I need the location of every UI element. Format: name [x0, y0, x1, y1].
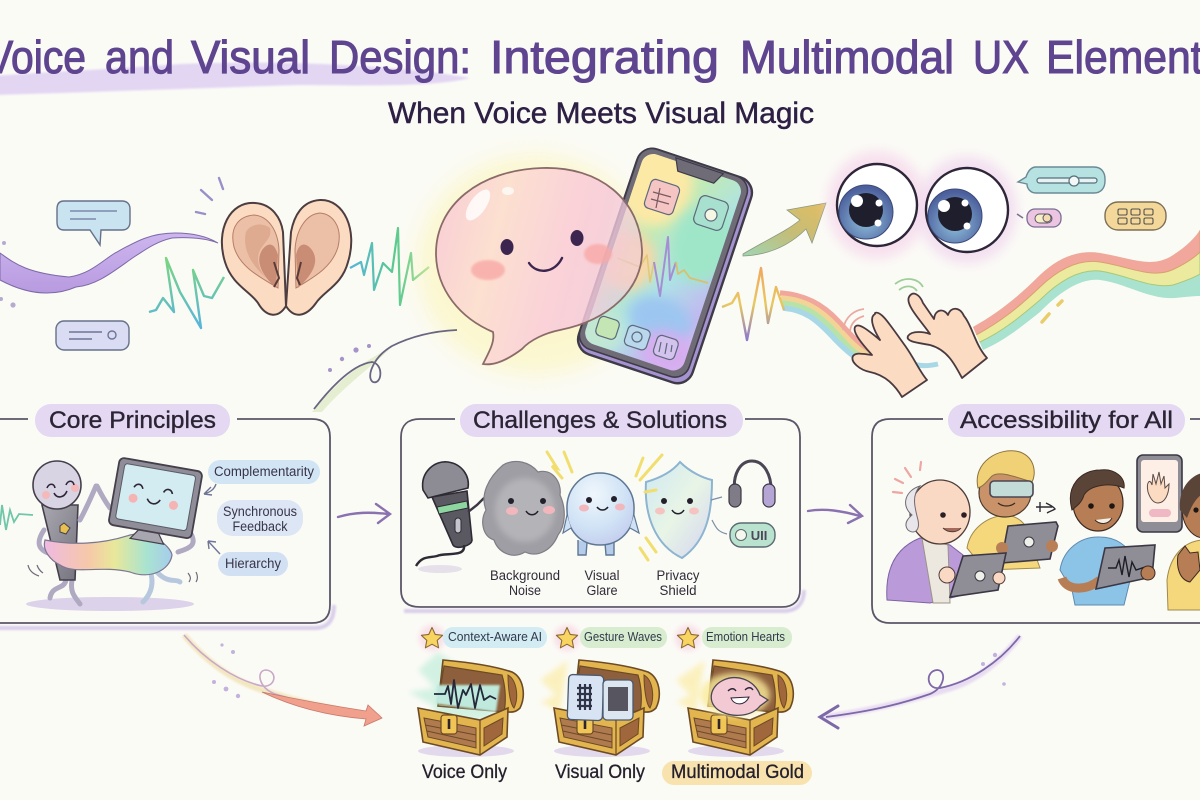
caption: Visual Only [555, 762, 645, 783]
voice ribbon [0, 233, 218, 293]
grid card [567, 674, 604, 721]
wave stub [0, 505, 33, 530]
rainbow scarf [44, 534, 172, 575]
microphone character [33, 461, 81, 580]
arrow: core to challenges [338, 504, 390, 523]
person: boy in blue [1060, 470, 1135, 605]
treasure: voice only [408, 625, 547, 783]
icon: chat bubble [57, 201, 130, 245]
icon: phone [576, 148, 754, 384]
icon: eyes [827, 151, 1017, 264]
high five arms [39, 486, 193, 555]
panel: core principles [0, 404, 334, 628]
panel frame [401, 419, 800, 607]
icon: message card [56, 321, 129, 350]
caption: Voice Only [422, 762, 507, 783]
label: complementarity [208, 460, 320, 484]
sound wave blue green [350, 228, 429, 305]
connector arrows [711, 497, 727, 534]
small arrows [204, 484, 220, 554]
treasure: visual only [540, 625, 667, 783]
label: hierarchy: Hierarchy [225, 556, 281, 571]
speech bubble glow [417, 155, 653, 375]
arrow: challenges to accessibility [808, 505, 862, 523]
glare blob [563, 473, 639, 555]
label: privacy shield: Shield [660, 583, 696, 598]
subtitle: When Voice Meets Visual Magic [388, 97, 814, 130]
chest [554, 660, 659, 757]
heading pill [948, 404, 1185, 437]
label: synchronous feedback: Synchronous [223, 504, 297, 519]
rainbow ribbon right [973, 230, 1200, 350]
shadow [26, 597, 194, 611]
icon: touch hands [843, 279, 987, 397]
feature pill [443, 627, 547, 648]
title: Design: [329, 31, 471, 83]
UI pill [730, 523, 775, 547]
label: visual glare [584, 568, 620, 598]
person: blond child [967, 451, 1040, 570]
content glow [436, 685, 500, 712]
person: elderly man [887, 480, 970, 603]
caption: Multimodal Gold [671, 762, 804, 783]
tablet: boy [1096, 545, 1155, 589]
feature pill: Context-Aware AI [448, 630, 542, 644]
yellow sparkle [1042, 301, 1062, 322]
label: synchronous feedback: Feedback [232, 519, 288, 534]
panel: challenges and solutions [401, 404, 804, 611]
sound wave [434, 680, 496, 708]
icon: two ears [222, 200, 351, 315]
feature pill: Gesture Waves [584, 630, 662, 644]
chest [418, 660, 523, 757]
sound ticks [196, 178, 223, 214]
heading: Core Principles [49, 407, 216, 434]
happy bubble [711, 678, 768, 715]
hearing ticks [893, 462, 921, 493]
panel frame [872, 419, 1200, 623]
caption pill [662, 761, 812, 785]
sound wave multicolor [722, 268, 784, 340]
noise cloud [483, 461, 564, 555]
speech bubble character [436, 168, 642, 364]
panel frame [0, 419, 330, 623]
feature pill [702, 627, 792, 648]
label: visual glare: Visual [584, 568, 620, 583]
microphone [416, 462, 484, 573]
arrow: core to treasure [184, 635, 382, 726]
star [675, 625, 701, 651]
title: UX [973, 31, 1029, 83]
chest [688, 660, 793, 757]
title: Multimodal [740, 31, 954, 83]
curl arrow from bubble [312, 330, 457, 412]
feature pill: Emotion Hearts [706, 630, 785, 644]
sound glyph [1036, 502, 1055, 513]
slider chip [1018, 167, 1105, 193]
dark glyph [608, 687, 628, 711]
glow [408, 652, 492, 720]
heading: Challenges & Solutions [473, 407, 727, 434]
title: Visual [191, 31, 310, 83]
title brush highlight [0, 63, 470, 95]
label: privacy shield: Privacy [656, 568, 700, 583]
phone app icons [594, 178, 730, 361]
heading: Accessibility for All [960, 407, 1173, 434]
privacy shield [646, 462, 712, 558]
label: background noise: Background [490, 568, 560, 583]
mic legs [50, 580, 80, 604]
panel: accessibility for all [872, 404, 1200, 628]
label: hierarchy [218, 552, 288, 576]
monitor legs [143, 570, 180, 602]
arrow: accessibility to treasure [820, 636, 1020, 728]
glow [676, 660, 705, 712]
headphones [729, 461, 775, 507]
label: background noise: Noise [509, 583, 541, 598]
grid glyph [577, 684, 592, 710]
glare sparks [547, 452, 662, 560]
label: complementarity: Complementarity [214, 464, 314, 479]
glow [540, 660, 568, 712]
gold glow [700, 673, 770, 717]
person: girl [1167, 472, 1200, 610]
heading pill [35, 404, 230, 437]
tablet: child [996, 522, 1058, 563]
title: Integrating [490, 31, 719, 83]
title: and [105, 31, 174, 83]
rainbow ribbon left [780, 293, 938, 366]
grid chip [1105, 202, 1166, 230]
gold arrow to eyes [743, 203, 826, 256]
monitor character [106, 457, 203, 549]
label: background noise [490, 568, 560, 598]
sound wave green blue [149, 258, 224, 328]
phone with hand [1137, 455, 1182, 532]
label: visual glare: Glare [586, 583, 618, 598]
star [554, 625, 580, 651]
feature pill [580, 627, 667, 648]
phone sound wave [617, 237, 708, 296]
heading pill [460, 404, 743, 437]
star [419, 625, 445, 651]
UI pill: UII [751, 528, 767, 543]
motion ticks [28, 565, 198, 582]
tablet: elderly man [939, 553, 1006, 597]
label: synchronous feedback [217, 500, 303, 536]
dark card [603, 680, 633, 720]
label: privacy shield [656, 568, 700, 598]
toggle chip [1017, 209, 1061, 227]
decorative dots [0, 241, 16, 308]
treasure: multimodal gold [662, 625, 812, 785]
